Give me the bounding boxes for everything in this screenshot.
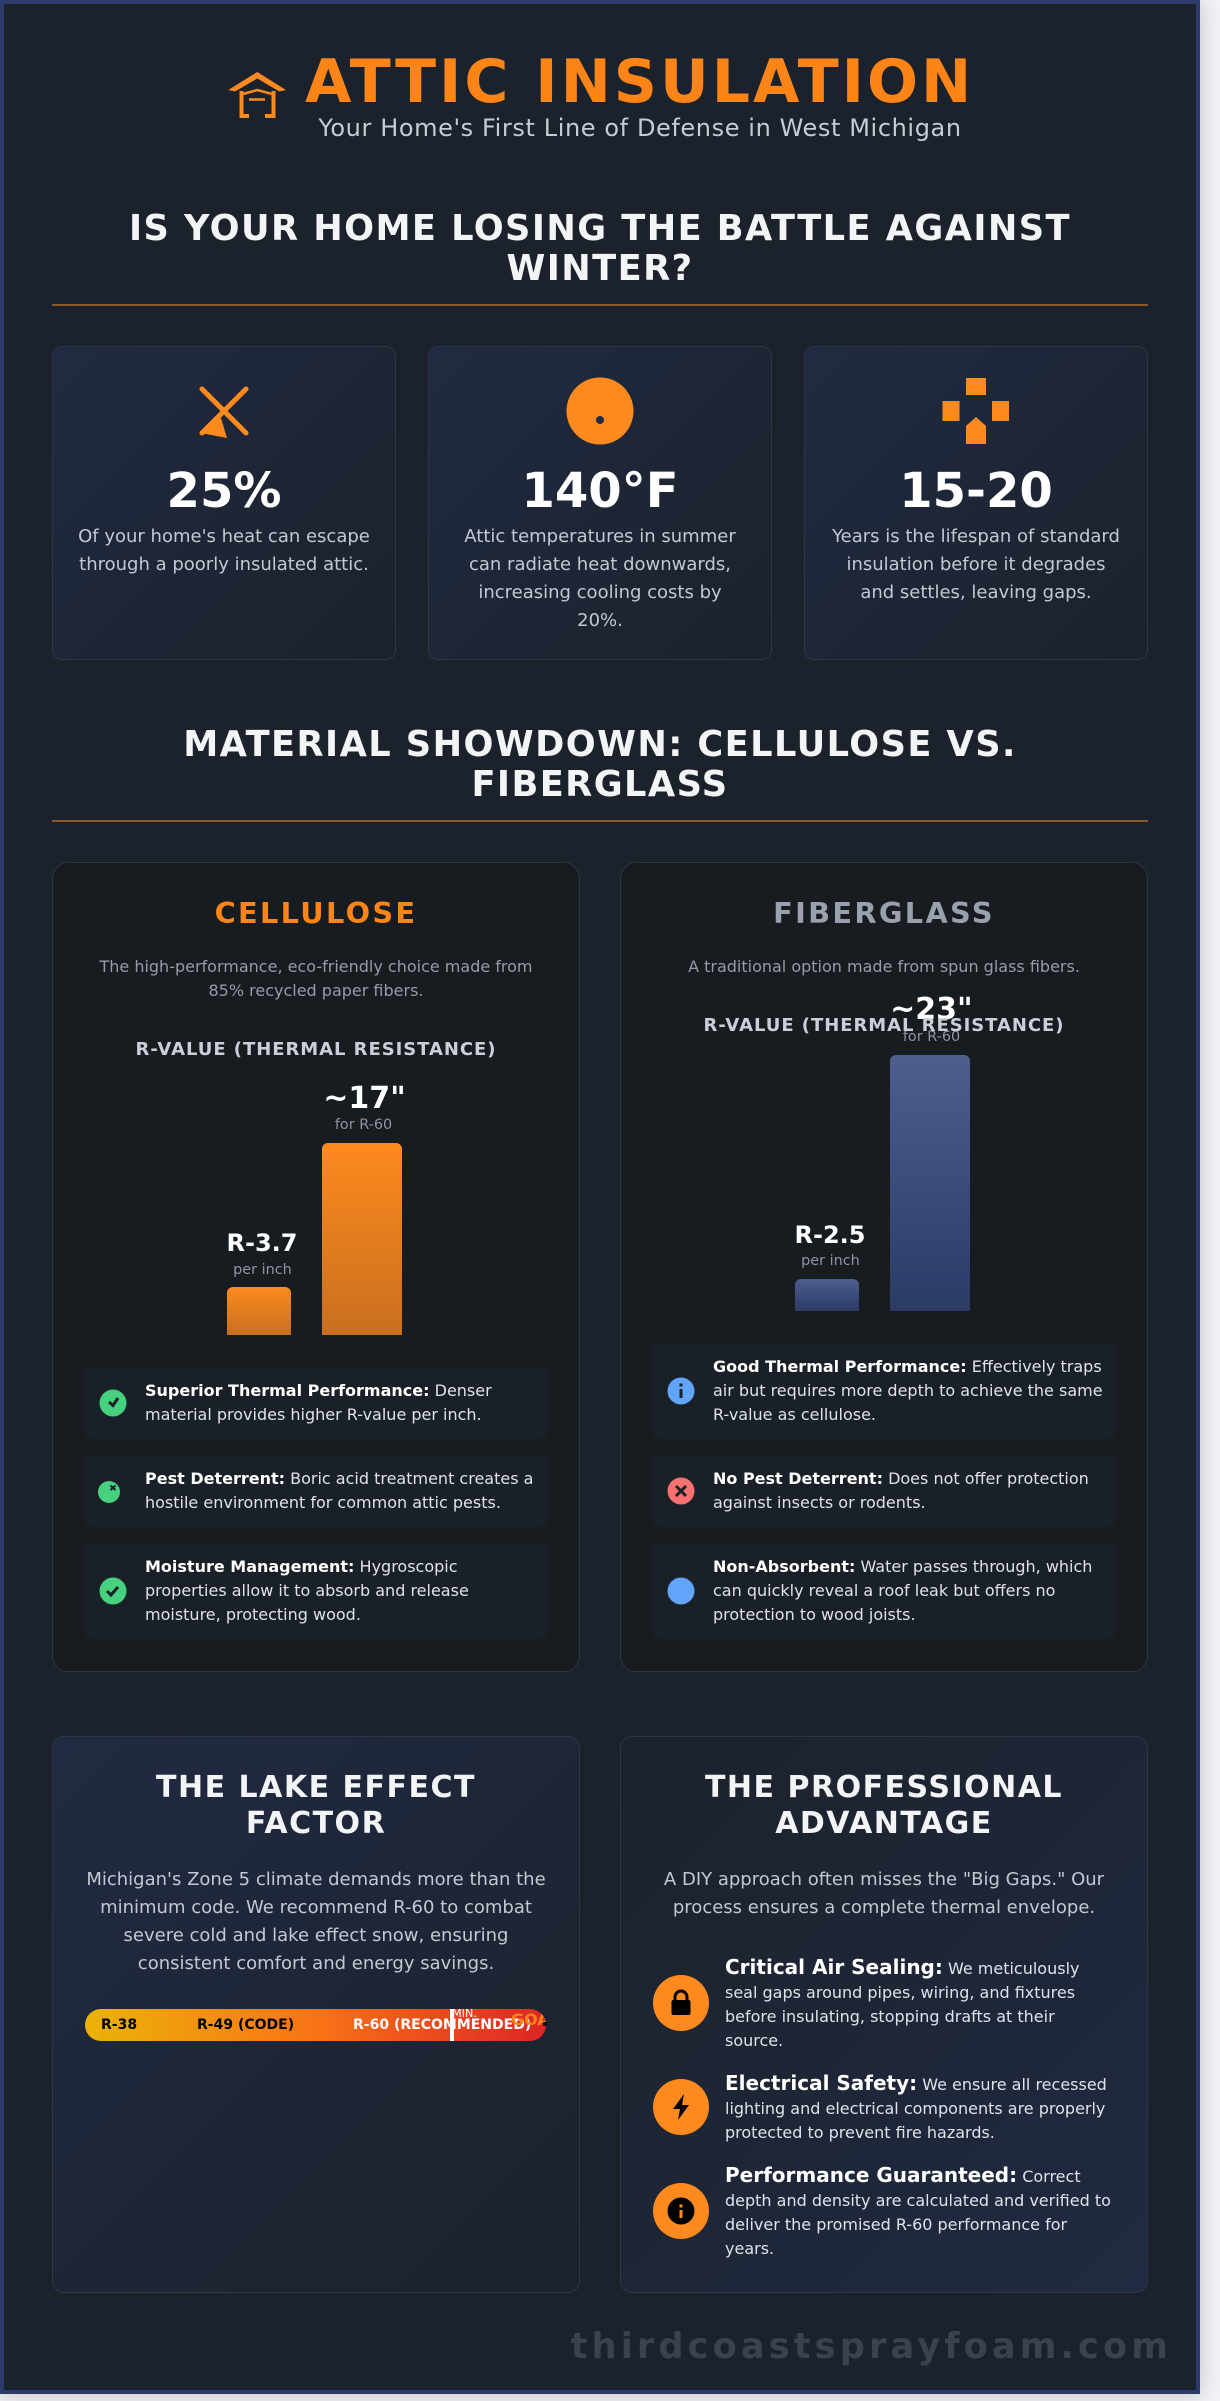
- icon: cross: [668, 1478, 694, 1504]
- item text: [713, 1468, 1089, 1512]
- item text: [725, 2070, 1107, 2142]
- panel: fiberglass: [620, 862, 1148, 1672]
- list item: moisture: [84, 1543, 548, 1639]
- item text: Electrical Safety: We ensure all recessed: [725, 2070, 1107, 2094]
- value: 23 inches: ~23": [890, 992, 973, 1026]
- item text: hostile environment for common attic pests.: [145, 1493, 501, 1512]
- label: R-49: R-49 (CODE): [197, 2017, 294, 2033]
- panel title: FACTOR: [246, 1806, 386, 1840]
- bar chart label: R-VALUE (THERMAL RESISTANCE): [704, 1015, 1064, 1036]
- stat description: [464, 526, 736, 631]
- unit: per inch: per inch: [801, 1253, 860, 1269]
- stat description: [78, 526, 370, 575]
- icon: lock: [653, 1975, 709, 2031]
- panel title: THE LAKE EFFECT: [156, 1770, 476, 1804]
- stat number: 15-20: [899, 463, 1053, 519]
- item text: years.: [725, 2239, 774, 2258]
- value: R-2.5: R-2.5: [795, 1221, 865, 1249]
- item text: deliver the promised R-60 performance for: [725, 2215, 1067, 2234]
- icon: bolt: [653, 2079, 709, 2135]
- icon: sun disc: [566, 378, 634, 444]
- panel title: ADVANTAGE: [775, 1806, 993, 1840]
- item text: R-value as cellulose.: [713, 1405, 876, 1424]
- title: ATTIC INSULATION: [305, 47, 974, 117]
- panel title: THE PROFESSIONAL: [705, 1770, 1063, 1804]
- heading: material showdown: FIBERGLASS: [471, 764, 729, 804]
- stat number: 140°F: [522, 463, 678, 519]
- icon: info: [653, 2183, 709, 2239]
- item text: No Pest Deterrent: Does not offer protection: [713, 1468, 1089, 1488]
- list item: thermal: [652, 1343, 1116, 1439]
- item: performance: [653, 2162, 1111, 2258]
- item text: protected to prevent fire hazards.: [725, 2123, 995, 2142]
- item text: depth and density are calculated and verified to: [725, 2191, 1111, 2210]
- list item: pest: [84, 1455, 548, 1527]
- heading: winter: WINTER?: [506, 248, 693, 288]
- item text: Pest Deterrent: Boric acid treatment creates a: [145, 1468, 533, 1488]
- bar chart label: R-VALUE (THERMAL RESISTANCE): [136, 1039, 496, 1060]
- item text: Critical Air Sealing: We meticulously: [725, 1954, 1079, 1978]
- item text: source.: [725, 2031, 783, 2050]
- item text: Superior Thermal Performance: Denser: [145, 1380, 492, 1400]
- panel text: [664, 1869, 1104, 1918]
- panel: stat 15-20: [804, 346, 1148, 660]
- heading: winter: IS YOUR HOME LOSING THE BATTLE AGAINST: [129, 208, 1071, 249]
- item text: can quickly reveal a roof leak but offers no: [713, 1581, 1055, 1600]
- list item: absorbent: [652, 1543, 1116, 1639]
- heading: material showdown: MATERIAL SHOWDOWN: CELLULOSE VS.: [183, 724, 1017, 765]
- panel text: consistent comfort and energy savings.: [138, 1953, 494, 1974]
- unit: for R-60: for R-60: [335, 1117, 392, 1133]
- watermark: thirdcoastsprayfoam.com: [571, 2326, 1172, 2367]
- scale end mark: [543, 2022, 546, 2026]
- icon: crossed tools: [200, 386, 248, 438]
- item text: seal gaps around pipes, wiring, and fixtures: [725, 1983, 1075, 2002]
- fiberglass title: FIBERGLASS: [773, 896, 995, 930]
- panel: lake effect: [52, 1736, 580, 2293]
- stat description: 20%.: [577, 610, 623, 631]
- panel: stat 140F: [428, 346, 772, 660]
- item text: Non-Absorbent: Water passes through, which: [713, 1556, 1092, 1576]
- icon: check: [100, 1390, 126, 1416]
- cellulose title: CELLULOSE: [215, 896, 417, 930]
- unit: for R-60: for R-60: [903, 1029, 960, 1045]
- stat description: and settles, leaving gaps.: [860, 582, 1092, 603]
- item text: against insects or rodents.: [713, 1493, 926, 1512]
- unit: per inch: per inch: [233, 1262, 292, 1278]
- cellulose description: 85% recycled paper fibers.: [208, 981, 424, 1000]
- icon: check: [100, 1578, 126, 1604]
- stat number: 25%: [167, 463, 281, 519]
- item text: [725, 2162, 1111, 2258]
- item text: [145, 1556, 469, 1624]
- stat description: Years is the lifespan of standard: [832, 526, 1120, 547]
- stat description: [832, 526, 1120, 603]
- stat description: Attic temperatures in summer: [464, 526, 736, 547]
- label: R-60: R-60 (RECOMMENDED): [353, 2017, 531, 2033]
- heading: winter: [129, 208, 1071, 288]
- cellulose description: The high-performance, eco-friendly choice made from: [99, 957, 533, 976]
- label: R-38: R-38: [101, 2017, 137, 2033]
- item text: air but requires more depth to achieve the same: [713, 1381, 1103, 1400]
- item text: [725, 1954, 1079, 2050]
- bar: per inch: [795, 1279, 859, 1311]
- stat description: through a poorly insulated attic.: [79, 554, 369, 575]
- panel text: Michigan's Zone 5 climate demands more than the: [86, 1869, 546, 1890]
- item text: [713, 1356, 1103, 1424]
- item: electrical: [653, 2070, 1107, 2142]
- item text: [713, 1556, 1092, 1624]
- panel: cellulose: [52, 862, 580, 1672]
- item text: properties allow it to absorb and release: [145, 1581, 469, 1600]
- item text: before insulating, stopping drafts at their: [725, 2007, 1055, 2026]
- panel text: A DIY approach often misses the "Big Gaps." Our: [664, 1869, 1104, 1890]
- list item: pest: [652, 1455, 1116, 1527]
- bar: for R-60: [322, 1143, 402, 1335]
- item text: [145, 1468, 533, 1512]
- panel: stat 25%: [52, 346, 396, 660]
- item text: [145, 1380, 492, 1424]
- panel text: severe cold and lake effect snow, ensuring: [124, 1925, 508, 1946]
- fiberglass description: A traditional option made from spun glass fibers.: [688, 957, 1080, 976]
- icon: house: [228, 72, 286, 118]
- cellulose description: [99, 957, 533, 1000]
- stat description: can radiate heat downwards,: [469, 554, 731, 575]
- item text: moisture, protecting wood.: [145, 1605, 361, 1624]
- stat description: increasing cooling costs by: [478, 582, 722, 603]
- stat description: insulation before it degrades: [846, 554, 1106, 575]
- r-value scale bar: [85, 2009, 546, 2041]
- panel text: [86, 1869, 546, 1974]
- item text: material provides higher R-value per inch.: [145, 1405, 482, 1424]
- stat description: Of your home's heat can escape: [78, 526, 370, 547]
- panel text: process ensures a complete thermal envelope.: [673, 1897, 1095, 1918]
- item text: lighting and electrical components are properly: [725, 2099, 1105, 2118]
- subtitle: Your Home's First Line of Defense in West Michigan: [318, 114, 962, 142]
- item: air sealing: [653, 1954, 1079, 2050]
- bar: for R-60: [890, 1055, 970, 1311]
- bar: per inch: [227, 1287, 291, 1335]
- panel: professional advantage: [620, 1736, 1148, 2293]
- panel text: minimum code. We recommend R-60 to combat: [100, 1897, 532, 1918]
- item text: Performance Guaranteed: Correct: [725, 2162, 1081, 2186]
- item text: protection to wood joists.: [713, 1605, 916, 1624]
- panel title: [156, 1770, 476, 1840]
- panel title: [705, 1770, 1063, 1840]
- icon: info: [668, 1378, 694, 1404]
- icon: blue dot: [668, 1578, 694, 1604]
- list item: thermal: [84, 1367, 548, 1439]
- item text: Good Thermal Performance: Effectively traps: [713, 1356, 1102, 1376]
- item text: Moisture Management: Hygroscopic: [145, 1556, 458, 1576]
- marker: minimum: [450, 2009, 454, 2041]
- value: R-3.7: R-3.7: [227, 1229, 297, 1257]
- value: 17 inches: ~17": [323, 1080, 406, 1116]
- heading: material showdown: [183, 724, 1017, 804]
- icon: bug: [98, 1481, 120, 1503]
- icon: blocks: [942, 378, 1009, 444]
